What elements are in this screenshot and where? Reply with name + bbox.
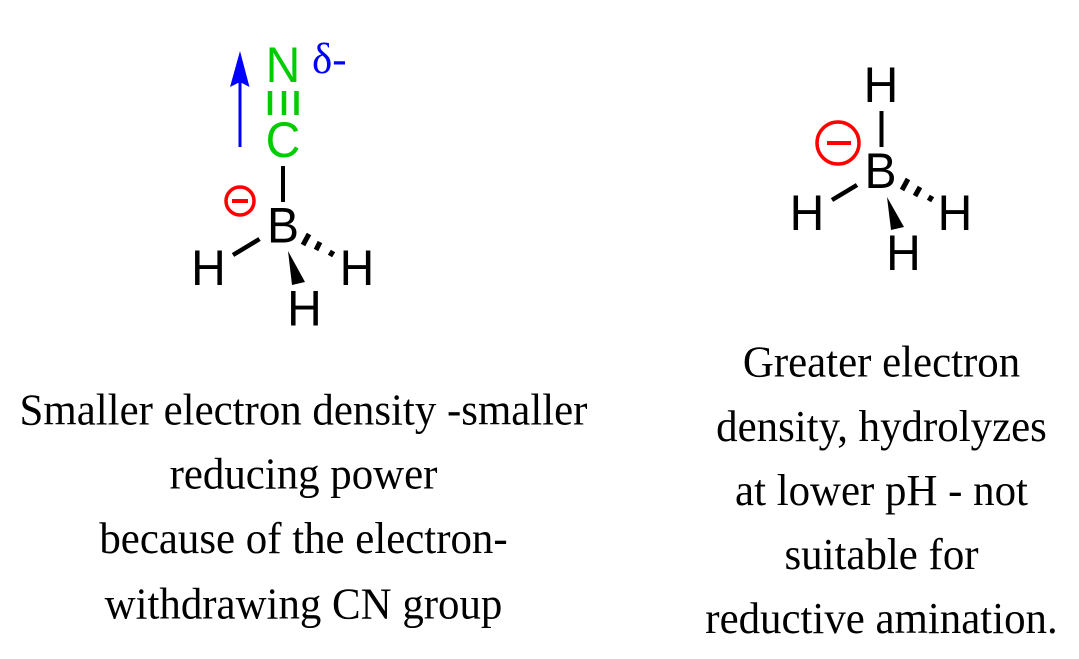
atom: N: N (266, 38, 300, 93)
atom: B: B (267, 199, 299, 254)
atom: H left: H (790, 186, 824, 241)
text block: left caption (20, 386, 588, 629)
text block: right caption: at lower pH - not (735, 466, 1028, 515)
bond: hashed (303, 234, 333, 256)
molecule: borohydride (790, 58, 972, 281)
text block: left caption: Smaller electron density -smaller (20, 386, 588, 435)
text block: right caption: reductive amination. (705, 594, 1058, 643)
bond: B-H left (832, 185, 857, 200)
bond: C-B (281, 166, 285, 202)
atom: H top: H (864, 58, 898, 113)
atom: H bottom: H (287, 282, 322, 337)
atom: H bottom: H (886, 226, 921, 281)
text block: right caption: suitable for (784, 530, 979, 579)
charge: negative (817, 122, 859, 164)
text block: right caption: density, hydrolyzes (716, 402, 1047, 451)
atom: C: C (266, 113, 300, 168)
label: delta minus: δ- (312, 36, 347, 83)
atom: H left: H (191, 241, 226, 296)
bond: B-H left (233, 239, 260, 255)
charge: negative (226, 187, 254, 215)
bond: wedge (887, 197, 904, 230)
text block: left caption: because of the electron- (99, 514, 508, 563)
triple bond (270, 91, 296, 115)
text block: left caption: withdrawing CN group (105, 580, 502, 629)
bond: wedge (288, 251, 305, 285)
atom: H right: H (938, 186, 972, 241)
bond: H-B (880, 111, 884, 147)
text block: right caption: Greater electron (743, 338, 1020, 387)
bond: hashed (902, 179, 932, 201)
molecule: cyanoborohydride (191, 36, 374, 337)
text block: right caption (705, 338, 1058, 643)
text block: left caption: reducing power (170, 450, 438, 499)
arrow: dipole (230, 51, 250, 147)
atom: B: B (864, 144, 897, 199)
atom: H right: H (340, 241, 374, 296)
